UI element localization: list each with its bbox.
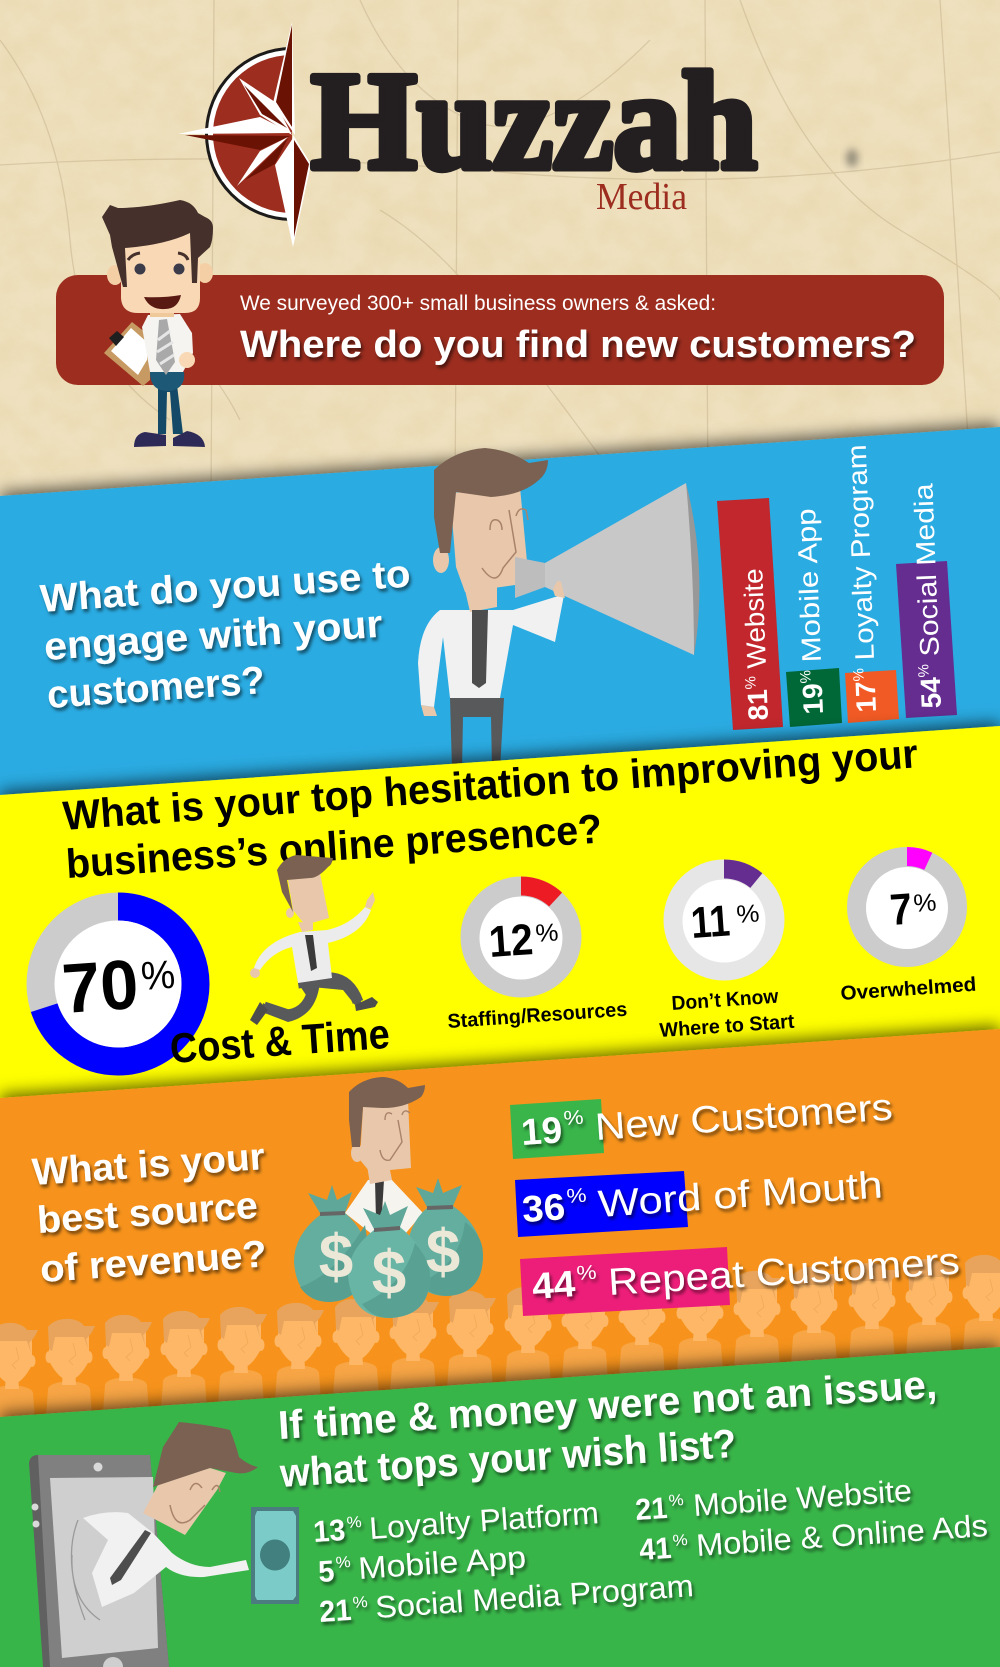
list: wish list items: %: [668, 1492, 684, 1510]
donut: 11% don't know where to start: %: [735, 899, 760, 929]
crowd of people: [0, 1255, 1000, 1448]
banner intro text: We surveyed 300+ small business owners & asked:: [240, 292, 716, 315]
bar: mobile app 19%: 19: [797, 683, 829, 715]
icon: phone with man: [29, 1422, 258, 1667]
logo: Media: Media: [596, 176, 687, 218]
donut: 11% don't know where to start: 11: [689, 896, 732, 948]
list: wish list items: Mobile & Online Ads: [695, 1508, 989, 1563]
list: wish list items: Loyalty Platform: [368, 1495, 600, 1546]
stat: 19% new customers: [510, 1087, 894, 1159]
character: man with megaphone: [418, 448, 699, 770]
stat: 44% repeat customers: [520, 1241, 961, 1316]
donut: 12% staffing: %: [534, 918, 559, 948]
character: running man: [168, 855, 391, 1072]
bar: mobile app 19%: %: [797, 670, 815, 684]
revenue heading: of revenue?: [39, 1233, 268, 1291]
wish list heading: If time & money were not an issue,: [277, 1363, 938, 1448]
wish list heading: what tops your wish list?: [278, 1422, 738, 1496]
donut: 70% cost and time: 70: [60, 945, 141, 1028]
engage heading: engage with your: [43, 603, 384, 669]
bar: social media 54%: 54: [915, 677, 947, 709]
revenue heading: What is your: [31, 1136, 266, 1194]
revenue heading: best source: [36, 1185, 259, 1242]
list: wish list items: Mobile Website: [692, 1473, 913, 1523]
donut: 11% don't know where to start: Where to Start: [659, 1011, 795, 1042]
logo: Huzzah wordmark: Huzzah: [311, 44, 757, 199]
bar: social media 54%: [896, 482, 957, 718]
panel: hesitation (yellow): [0, 726, 1000, 1130]
donut: 12% staffing: [447, 876, 628, 1033]
list: wish list items: %: [335, 1554, 351, 1572]
panel: wish list (green): [0, 1347, 1000, 1667]
icon: money bags: $: [319, 1223, 353, 1292]
donut: 70% cost and time: %: [140, 953, 177, 999]
list: wish list items: 5: [317, 1555, 335, 1589]
panel: revenue (orange): [0, 1029, 1000, 1448]
bar: mobile app 19%: Mobile App: [791, 508, 827, 663]
hesitation heading: business’s online presence?: [65, 805, 603, 887]
character: man with money bags: [294, 1077, 483, 1318]
bar: loyalty program 17%: Loyalty Program: [842, 444, 880, 661]
bar: loyalty program 17%: [841, 444, 899, 723]
stat: 44% repeat customers: Repeat Customers: [607, 1241, 961, 1304]
stat: 19% new customers: %: [563, 1107, 585, 1130]
donut: 12% staffing: Staffing/Resources: [447, 999, 628, 1033]
list: wish list items: 41: [638, 1532, 672, 1567]
engage heading: customers?: [46, 659, 266, 717]
list: wish list items: Social Media Program: [374, 1568, 695, 1625]
revenue heading: [31, 1136, 268, 1291]
list: wish list items: 21: [634, 1492, 668, 1527]
list: wish list items: Mobile App: [357, 1539, 527, 1586]
character: surveyor with clipboard: [102, 200, 213, 447]
bar: loyalty program 17%: 17: [850, 681, 882, 713]
list: wish list items: %: [672, 1532, 688, 1550]
icon: banknote: [251, 1507, 299, 1604]
hesitation heading: [61, 730, 919, 887]
engage heading: [39, 553, 412, 717]
bar: website 81%: [717, 498, 783, 730]
icon: money bags: $: [372, 1239, 406, 1308]
bar: social media 54%: Social Media: [908, 482, 945, 657]
donut: 7% overwhelmed: Overwhelmed: [840, 974, 977, 1005]
stat: 19% new customers: New Customers: [594, 1087, 894, 1149]
list: wish list items: %: [346, 1514, 362, 1532]
character: running man: Cost & Time: [168, 1010, 391, 1072]
icon: money bags: $: [426, 1218, 460, 1287]
bar: social media 54%: %: [915, 664, 933, 678]
donut: 70% cost and time: [26, 892, 210, 1076]
donut: 7% overwhelmed: [840, 847, 977, 1005]
stat: 36% word of mouth: 36: [521, 1186, 566, 1230]
bar chart: engagement channels: [717, 444, 957, 730]
bar: website 81%: %: [742, 676, 760, 690]
list: wish list items: [312, 1473, 989, 1629]
list: wish list items: 13: [312, 1514, 346, 1549]
donut: 7% overwhelmed: %: [912, 888, 937, 918]
donut: 12% staffing: 12: [487, 915, 535, 967]
donut: 11% don't know where to start: Don’t Know: [671, 986, 780, 1015]
list: wish list items: 21: [318, 1594, 352, 1629]
stat: 19% new customers: 19: [520, 1109, 563, 1153]
bar: loyalty program 17%: %: [850, 668, 868, 682]
donut: 7% overwhelmed: 7: [888, 885, 914, 935]
bar: website 81%: 81: [742, 689, 774, 721]
stat: 44% repeat customers: %: [576, 1262, 598, 1285]
hesitation heading: What is your top hesitation to improving your: [61, 730, 919, 839]
donut: 11% don't know where to start: [659, 860, 795, 1042]
stat: 36% word of mouth: Word of Mouth: [597, 1164, 884, 1226]
engage heading: What do you use to: [39, 553, 412, 621]
stat: 36% word of mouth: [515, 1164, 884, 1237]
banner: [56, 275, 944, 385]
map background: [0, 0, 1000, 520]
stat: 36% word of mouth: %: [566, 1185, 588, 1208]
list: wish list items: %: [352, 1594, 368, 1612]
stat: 44% repeat customers: 44: [531, 1263, 577, 1307]
banner heading: Where do you find new customers?: [240, 324, 916, 366]
icon: money bags: [294, 1178, 483, 1318]
bar: mobile app 19%: [786, 508, 842, 727]
panel: engage (blue): [0, 427, 1000, 830]
wish list heading: [277, 1363, 938, 1496]
bar: website 81%: Website: [738, 568, 772, 669]
logo: compass rose: [178, 22, 311, 247]
